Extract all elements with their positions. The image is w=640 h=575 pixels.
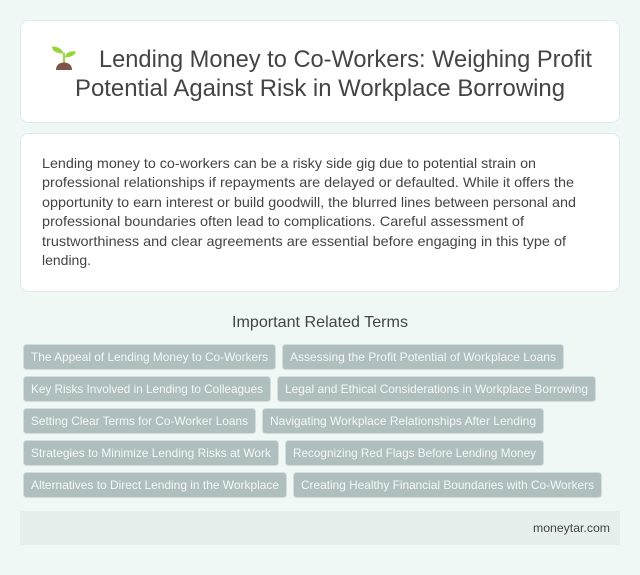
tag: Assessing the Profit Potential of Workplace Loans bbox=[290, 350, 556, 364]
tag list bbox=[24, 344, 602, 498]
tag: Alternatives to Direct Lending in the Workplace bbox=[31, 478, 279, 492]
panel: description bbox=[20, 134, 620, 292]
text block: description bbox=[42, 155, 576, 268]
tag bbox=[24, 376, 270, 402]
tag: Recognizing Red Flags Before Lending Money bbox=[293, 446, 536, 460]
tag: Legal and Ethical Considerations in Workplace Borrowing bbox=[285, 382, 588, 396]
tag bbox=[24, 472, 286, 498]
tag: Key Risks Involved in Lending to Colleagues bbox=[31, 382, 263, 396]
title: Lending Money to Co-Workers: Weighing Profit bbox=[99, 46, 592, 73]
text block: description: professional relationships if repayments are delayed or defaulted. While it offers the bbox=[42, 174, 574, 190]
tag bbox=[282, 344, 564, 370]
title bbox=[75, 46, 592, 102]
text block: description: professional boundaries often lead to complications. Careful assessment of bbox=[42, 213, 524, 229]
icon: seedling bbox=[52, 46, 76, 70]
tag: Setting Clear Terms for Co-Worker Loans bbox=[31, 414, 248, 428]
tag bbox=[294, 472, 602, 498]
heading: related terms: Important Related Terms bbox=[232, 314, 408, 331]
tag bbox=[24, 440, 278, 466]
tag bbox=[24, 344, 276, 370]
tag bbox=[286, 440, 544, 466]
tag: Creating Healthy Financial Boundaries with Co-Workers bbox=[301, 478, 594, 492]
text block: description: opportunity to earn interest or build goodwill, the blurred lines between personal and bbox=[42, 194, 576, 210]
footer: moneytar.com bbox=[533, 521, 610, 535]
text block: description: lending. bbox=[42, 252, 91, 268]
footer bbox=[20, 511, 620, 545]
tag bbox=[24, 408, 256, 434]
tag bbox=[278, 376, 596, 402]
text block: description: Lending money to co-workers can be a risky side gig due to potential strain on bbox=[42, 155, 536, 171]
text block: description: trustworthiness and clear agreements are essential before engaging in this type of bbox=[42, 233, 566, 249]
panel: title card bbox=[20, 20, 620, 122]
tag bbox=[262, 408, 544, 434]
tag: Navigating Workplace Relationships After Lending bbox=[270, 414, 536, 428]
tag: The Appeal of Lending Money to Co-Workers bbox=[31, 350, 268, 364]
title: Potential Against Risk in Workplace Borrowing bbox=[75, 75, 565, 102]
tag: Strategies to Minimize Lending Risks at Work bbox=[31, 446, 272, 460]
